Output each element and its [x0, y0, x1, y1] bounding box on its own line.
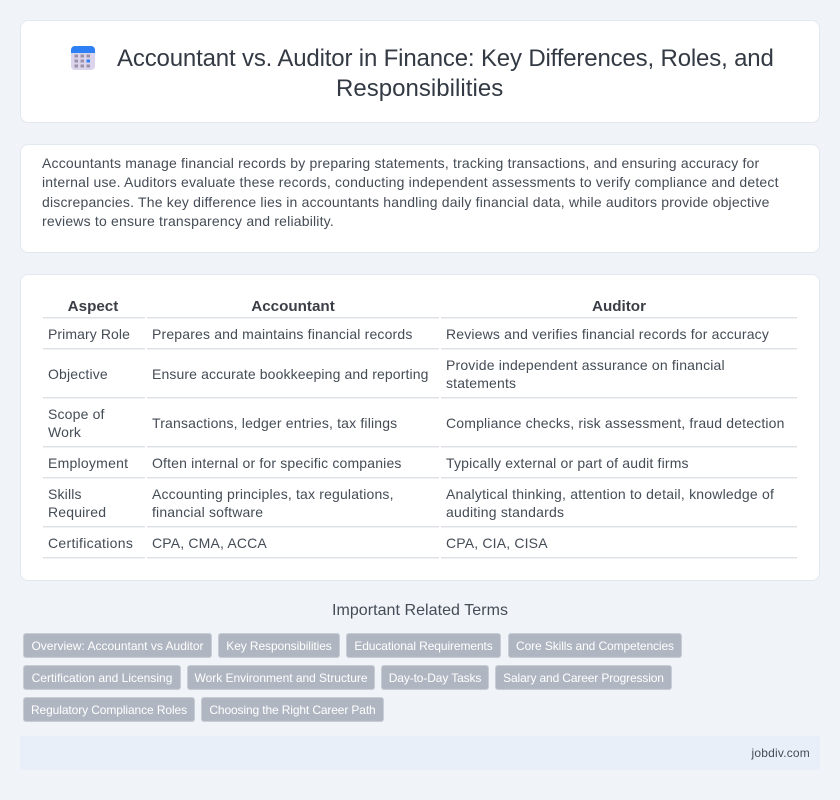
- row: Skills Required: financial software: [152, 504, 263, 520]
- row: Certifications: Certifications: [48, 535, 133, 551]
- row: Employment: Often internal or for specific companies: [152, 455, 402, 471]
- row: Objective: statements: [446, 375, 516, 391]
- footer bar: [20, 736, 820, 770]
- row: Skills Required: Skills: [48, 486, 82, 502]
- row: Primary Role: Primary Role: [48, 326, 130, 342]
- related terms tags: [23, 633, 682, 722]
- intro text: reviews to ensure transparency and reliability.: [42, 213, 334, 229]
- tag: [218, 633, 340, 658]
- tag: Choosing the Right Career Path: [209, 703, 376, 717]
- row: Certifications: CPA, CMA, ACCA: [152, 535, 267, 551]
- tag: Certification and Licensing: [32, 671, 172, 685]
- intro text: [42, 155, 779, 229]
- tag: [23, 697, 195, 722]
- tag: [23, 633, 212, 658]
- table: [43, 298, 797, 559]
- header: Accountant: Accountant: [251, 298, 335, 315]
- header: Auditor: Auditor: [592, 298, 646, 315]
- tag: Educational Requirements: [354, 639, 493, 653]
- row: Scope of Work: Transactions, ledger entries, tax filings: [152, 415, 397, 431]
- tag: Overview: Accountant vs Auditor: [31, 639, 204, 653]
- row: Scope of Work: [48, 406, 785, 440]
- tag: Work Environment and Structure: [195, 671, 367, 685]
- row: Certifications: CPA, CIA, CISA: [446, 535, 548, 551]
- row: Skills Required: Required: [48, 504, 106, 520]
- row: Scope of Work: Compliance checks, risk assessment, fraud detection: [446, 415, 785, 431]
- row: Primary Role: Reviews and verifies financial records for accuracy: [446, 326, 769, 342]
- intro text: discrepancies. The key difference lies in accountants handling daily financial data, while auditors provide objective: [42, 194, 770, 210]
- tag: Key Responsibilities: [226, 639, 332, 653]
- tag: [495, 665, 672, 690]
- footer source: jobdiv.com: [752, 746, 810, 760]
- tag: Regulatory Compliance Roles: [31, 703, 187, 717]
- row: Skills Required: Accounting principles, tax regulations,: [152, 486, 394, 502]
- row: Scope of Work: Work: [48, 424, 81, 440]
- row: Primary Role: Prepares and maintains financial records: [152, 326, 412, 342]
- row: Certifications: [48, 535, 548, 551]
- header card: [20, 20, 820, 123]
- tag: [201, 697, 384, 722]
- comparison table panel: [20, 274, 820, 581]
- row: Skills Required: auditing standards: [446, 504, 564, 520]
- tag: [23, 665, 181, 690]
- tag: Core Skills and Competencies: [516, 639, 674, 653]
- tag: [346, 633, 501, 658]
- row: Employment: Employment: [48, 455, 128, 471]
- row: Employment: [48, 455, 689, 471]
- intro text: internal use. Auditors evaluate these records, conducting independent assessments to verify compliance and detect: [42, 174, 779, 190]
- row: Primary Role: [48, 326, 769, 342]
- tag: [187, 665, 375, 690]
- row: Objective: Objective: [48, 366, 108, 382]
- row: Objective: [48, 357, 725, 391]
- title: Responsibilities: [336, 75, 503, 102]
- title: Accountant vs. Auditor in Finance: Key Differences, Roles, and: [117, 45, 774, 72]
- row: Employment: Typically external or part of audit firms: [446, 455, 689, 471]
- intro text: Accountants manage financial records by preparing statements, tracking transactions, and ensuring accuracy for: [42, 155, 759, 171]
- title: [117, 45, 774, 102]
- tag: [508, 633, 682, 658]
- row: Scope of Work: Scope of: [48, 406, 105, 422]
- row: Skills Required: [48, 486, 774, 520]
- related terms heading: Important Related Terms: [332, 602, 508, 619]
- tag: Salary and Career Progression: [503, 671, 664, 685]
- header: Aspect: Aspect: [68, 298, 118, 315]
- row: Skills Required: Analytical thinking, attention to detail, knowledge of: [446, 486, 774, 502]
- intro card: [20, 144, 820, 253]
- row: Objective: Ensure accurate bookkeeping and reporting: [152, 366, 429, 382]
- tag: [381, 665, 489, 690]
- tag: Day-to-Day Tasks: [389, 671, 481, 685]
- icon: calendar: [71, 46, 95, 70]
- row: Objective: Provide independent assurance on financial: [446, 357, 725, 373]
